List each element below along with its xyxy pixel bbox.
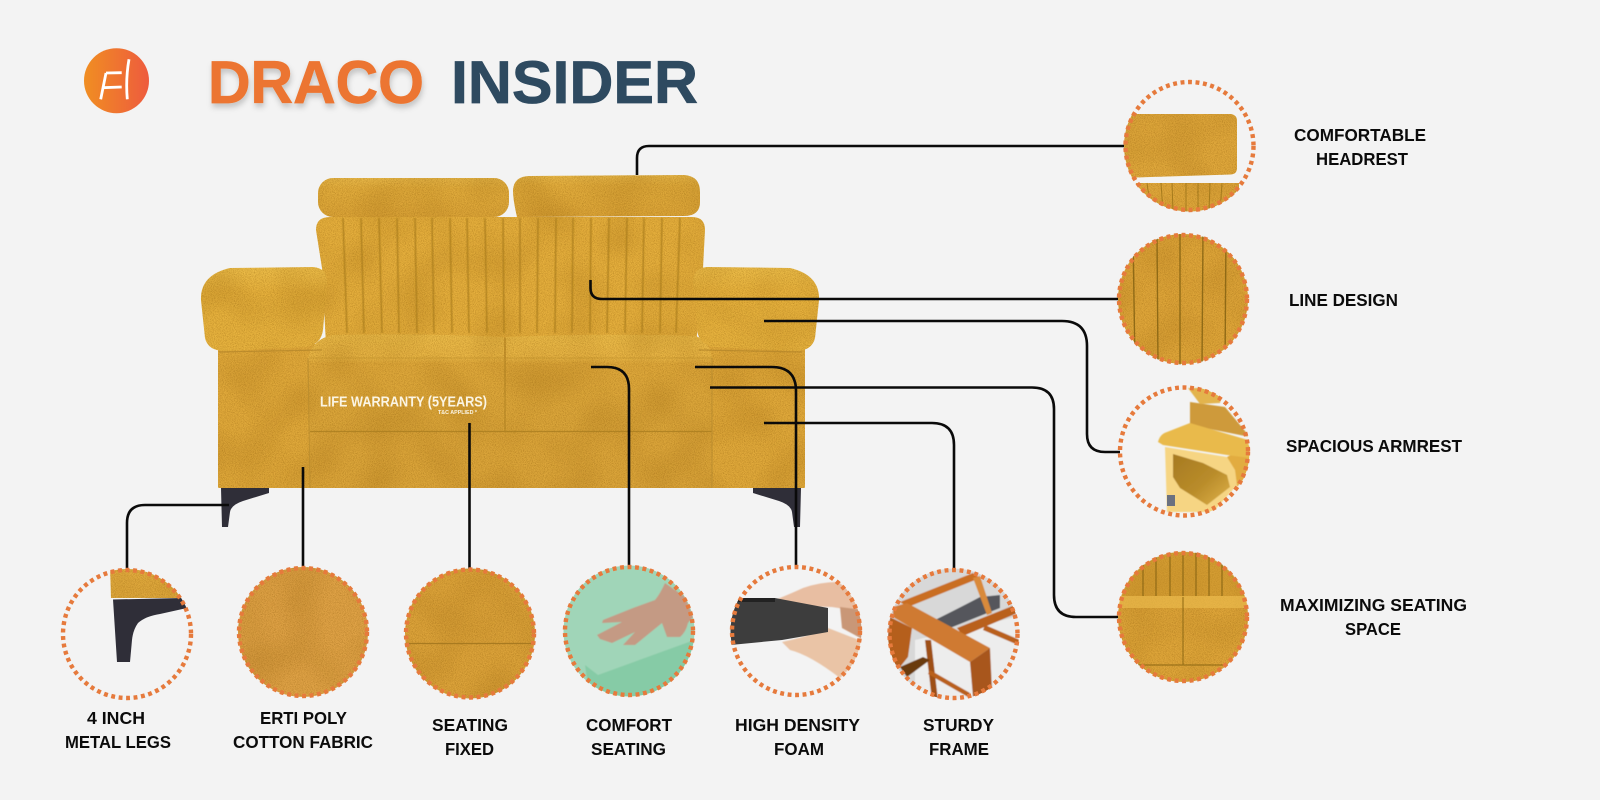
callout: seating fixed: FIXED: [445, 739, 494, 759]
right seat cushion: [506, 335, 712, 431]
callout: high density foam: [730, 567, 864, 759]
callout: metal legs: 4 INCH: [87, 708, 145, 728]
front base panel: [310, 431, 712, 488]
warranty text: [320, 394, 487, 416]
seam lines: [219, 338, 802, 488]
callout: seating fixed: [405, 568, 535, 759]
callout: fabric: ERTI POLY: [260, 708, 347, 728]
callout: comfortable headrest: [1120, 82, 1426, 215]
back channel lines: [343, 218, 680, 333]
warranty text: LIFE WARRANTY (5YEARS): [320, 394, 487, 410]
sofa legs: [221, 488, 801, 527]
callout: sturdy frame: FRAME: [929, 739, 989, 759]
illustration: yellow two-seater sofa: [201, 175, 819, 527]
callout: line design: [1118, 234, 1398, 365]
right armrest: [693, 267, 819, 351]
left armrest: [201, 267, 327, 351]
icon: brand logo: [84, 48, 149, 113]
callout: fabric: [233, 567, 373, 752]
callout: maximizing seating space: [1115, 550, 1467, 682]
title: INSIDER: [451, 49, 698, 116]
callout: maximizing seating space: MAXIMIZING SEATING: [1280, 595, 1467, 615]
callout: comfort seating foam: COMFORT: [586, 715, 672, 735]
callout: spacious armrest: SPACIOUS ARMREST: [1286, 436, 1462, 456]
callout: fabric: COTTON FABRIC: [233, 732, 373, 752]
callout: high density foam: FOAM: [774, 739, 824, 759]
leader lines: [127, 146, 1124, 617]
lower body: [218, 344, 805, 488]
callout: comfortable headrest: COMFORTABLE: [1294, 125, 1426, 145]
callout: comfortable headrest: HEADREST: [1316, 149, 1408, 169]
callout: line design: LINE DESIGN: [1289, 290, 1398, 310]
sofa upholstery: [201, 175, 819, 488]
callout: comfort seating foam: [560, 560, 700, 759]
left headrest: [318, 178, 509, 217]
callout: maximizing seating space: SPACE: [1345, 619, 1401, 639]
callout: metal legs: [63, 565, 191, 752]
backrest: [316, 217, 705, 345]
left seat cushion: [308, 334, 504, 431]
title: [208, 49, 698, 116]
callout: sturdy frame: STURDY: [923, 715, 994, 735]
callout: sturdy frame: [885, 565, 1025, 759]
warranty text: T&C APPLIED *: [438, 410, 478, 416]
callout: seating fixed: SEATING: [432, 715, 508, 735]
callout: metal legs: METAL LEGS: [65, 732, 171, 752]
right headrest: [513, 175, 700, 217]
callout: comfort seating foam: SEATING: [591, 739, 666, 759]
callout: high density foam: HIGH DENSITY: [735, 715, 860, 735]
callout: spacious armrest: [1120, 388, 1462, 516]
title: DRACO: [208, 49, 424, 116]
